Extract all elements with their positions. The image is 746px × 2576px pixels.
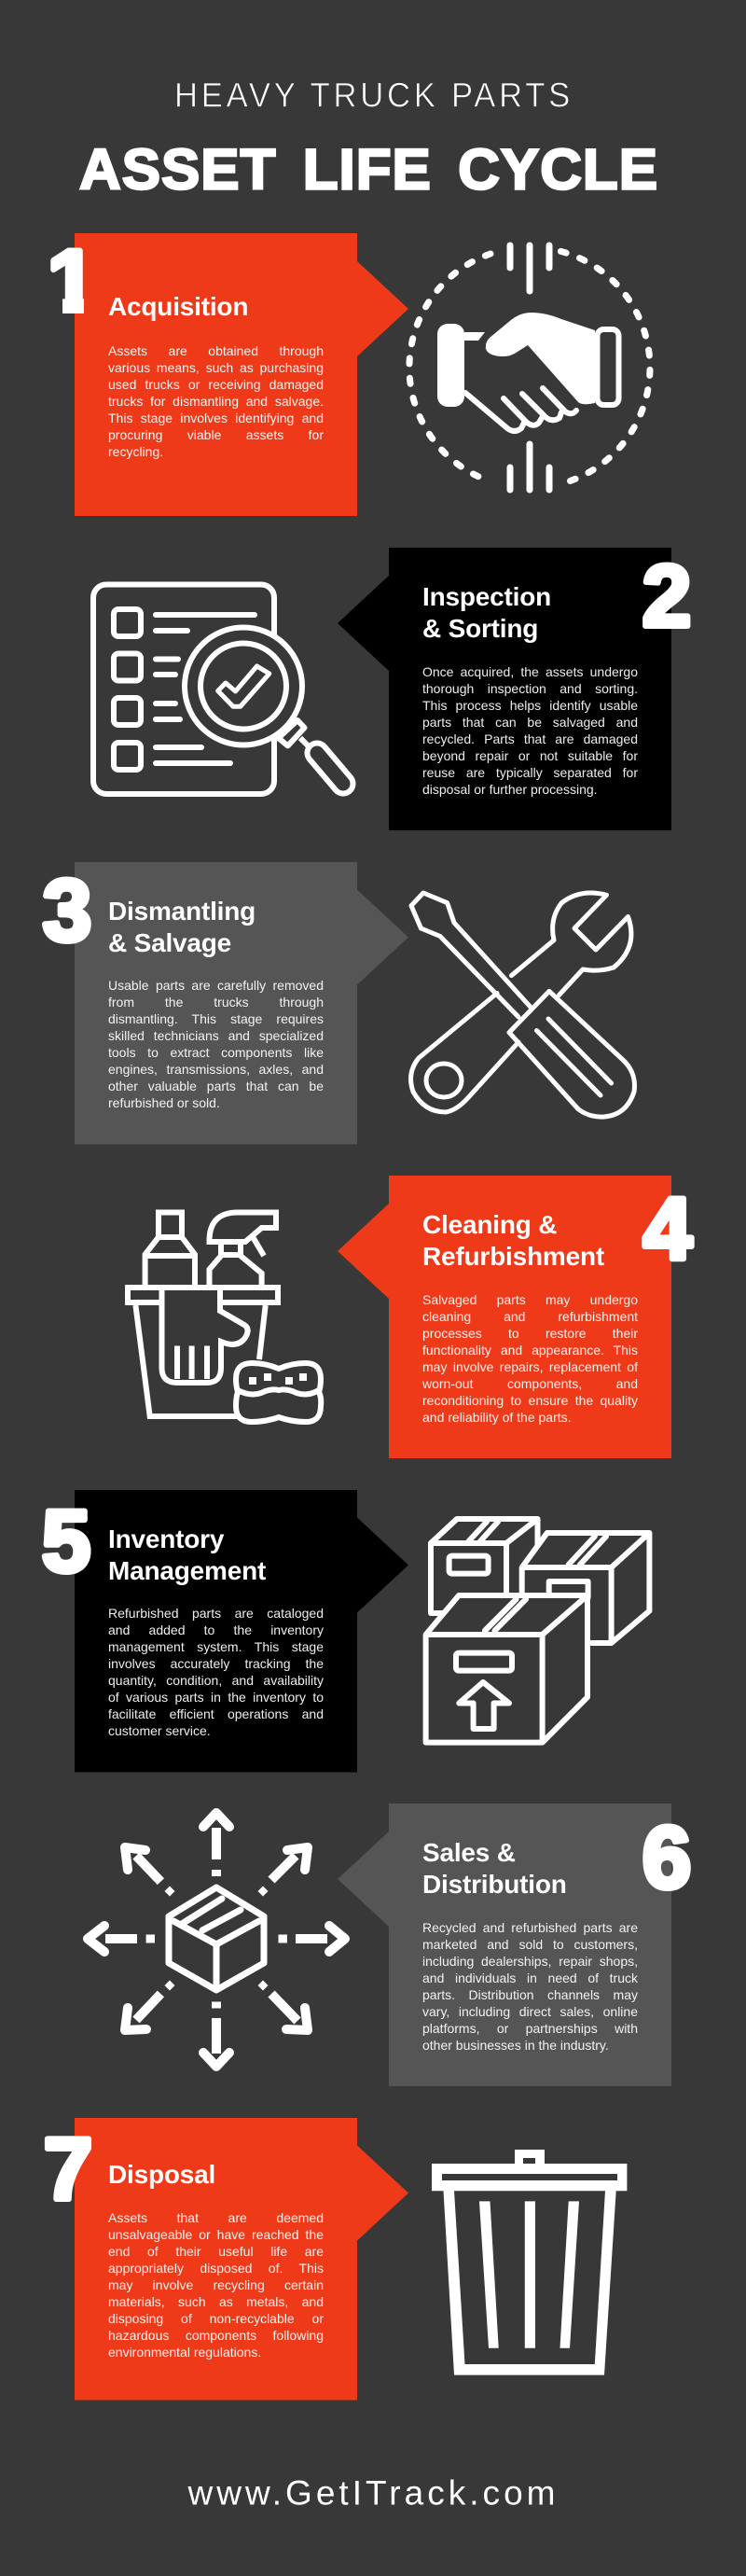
body text: Once acquired, the assets undergo [422,664,638,679]
step number 7: 7 [43,2120,92,2218]
body text: various means, such as purchasing [108,360,324,375]
body text: materials, such as metals, and [108,2294,324,2309]
body text: This stage involves identifying and [108,411,324,425]
heading [422,1838,567,1899]
body text: and reliability of the parts. [422,1409,572,1424]
body text: processes to restore their [422,1325,638,1340]
heading: Dismantling [108,897,256,926]
step number 1: 1 [48,231,96,329]
body text: and individuals in need of truck [422,1970,638,1985]
body text: involves accurately tracking the [108,1656,324,1671]
body text: may involve repairs, replacement of [422,1358,638,1373]
body text: appropriately disposed of. This [108,2261,324,2276]
body text: reconditioning to ensure the quality [422,1392,638,1407]
heading: & Salvage [108,928,231,957]
title: asset life cycle: ASSET LIFE CYCLE [79,138,658,202]
body text: end of their useful life are [108,2244,324,2259]
body text: quantity, condition, and availability [108,1673,324,1688]
panel: step 7 disposal [43,2118,627,2400]
icon: crossed wrench and screwdriver [408,890,637,1120]
body text: dismantling. This stage requires [108,1011,324,1026]
body text [422,1920,638,2053]
body text: disposing of non-recyclable or [108,2311,324,2326]
heading: Management [108,1556,266,1585]
heading: & Sorting [422,614,538,643]
heading: Sales & [422,1838,516,1867]
body text: Recycled and refurbished parts are [422,1920,638,1935]
panel background [75,862,408,1144]
heading: Inventory [108,1525,224,1553]
body text [108,1606,324,1738]
body text: environmental regulations. [108,2345,261,2360]
body text: recycling. [108,444,163,459]
body text: reuse are typically separated for [422,765,638,780]
heading: Inspection [422,582,551,611]
body text: procuring viable assets for [108,427,324,442]
body text: Salvaged parts may undergo [422,1291,638,1306]
icon: cleaning bucket with bottles, glove and sponge [125,1209,325,1425]
body text: Assets are obtained through [108,343,324,358]
body text: tools to extract components like [108,1045,324,1060]
heading: Acquisition [108,292,248,321]
body text: facilitate efficient operations and [108,1706,324,1721]
body text: This process helps identify usable [422,698,638,713]
heading: Refurbishment [422,1242,604,1271]
icon: trash can [432,2150,627,2375]
panel: step 1 acquisition [50,233,653,516]
body text: other businesses in the industry. [422,2038,609,2053]
body text: parts that can be salvaged and [422,715,638,730]
body text: used trucks or receiving damaged [108,377,324,392]
heading [422,582,551,643]
body text [108,978,324,1110]
step number 2: 2 [642,547,691,645]
icon: stacked cardboard boxes [423,1516,653,1746]
heading: Cleaning & [422,1210,557,1239]
body text [108,2210,324,2360]
panel: step 3 dismantling and salvage [42,861,637,1144]
body text: recycled. Parts that are damaged [422,731,638,746]
body text: Assets that are deemed [108,2210,324,2225]
step number 5: 5 [42,1491,90,1590]
body text: Refurbished parts are cataloged [108,1606,324,1621]
step number 6: 6 [642,1808,691,1906]
body text: parts. Distribution channels may [422,1987,638,2002]
body text: hazardous components following [108,2328,324,2343]
body text: management system. This stage [108,1639,324,1654]
body text: thorough inspection and sorting. [422,681,638,696]
icon: handshake [407,243,653,493]
panel background [338,1176,671,1458]
body text: skilled technicians and specialized [108,1028,324,1043]
panel background [75,233,408,516]
body text: engines, transmissions, axles, and [108,1062,324,1077]
body text: vary, including direct sales, online [422,2004,638,2019]
body text: worn-out components, and [422,1375,638,1390]
panel background [75,1489,408,1773]
panel background [75,2118,408,2400]
website footer: www.GetITrack.com [186,2474,556,2512]
panel: step 4 cleaning and refurbishment [125,1176,695,1458]
title: heavy truck parts: HEAVY TRUCK PARTS [174,77,573,114]
panel: step 6 sales and distribution [83,1803,691,2086]
step number 4: 4 [643,1179,692,1277]
body text [108,343,324,459]
body text: disposal or further processing. [422,782,598,797]
panel: step 2 inspection and sorting [90,547,691,830]
body text [422,664,638,797]
body text: platforms, or partnerships with [422,2021,638,2036]
panel background [338,548,671,830]
panel: step 5 inventory management [41,1490,653,1773]
body text: other valuable parts that can be [108,1079,324,1093]
body text: marketed and sold to customers, [422,1937,638,1952]
step number 3: 3 [42,861,91,959]
body text: including dealerships, repair shops, [422,1954,638,1969]
body text: cleaning and refurbishment [422,1308,638,1323]
icon: box with arrows radiating outward [83,1808,350,2071]
body text: may involve recycling certain [108,2277,324,2292]
body text: customer service. [108,1723,211,1738]
body text: of various parts in the inventory to [108,1690,324,1705]
heading [108,1525,266,1585]
body text: Usable parts are carefully removed [108,978,324,993]
body text: beyond repair or not suitable for [422,748,638,763]
body text [422,1291,638,1425]
body text: unsalvageable or have reached the [108,2227,324,2242]
body text: from the trucks through [108,995,324,1010]
body text: refurbished or sold. [108,1095,220,1110]
heading [108,897,256,957]
panel background [338,1803,671,2086]
body text: functionality and appearance. This [422,1342,638,1357]
icon: checklist with magnifying glass [90,582,356,797]
heading: Distribution [422,1870,567,1899]
body text: and added to the inventory [108,1622,324,1637]
heading [422,1210,604,1271]
body text: trucks for dismantling and salvage. [108,394,324,409]
heading: Disposal [108,2160,215,2189]
